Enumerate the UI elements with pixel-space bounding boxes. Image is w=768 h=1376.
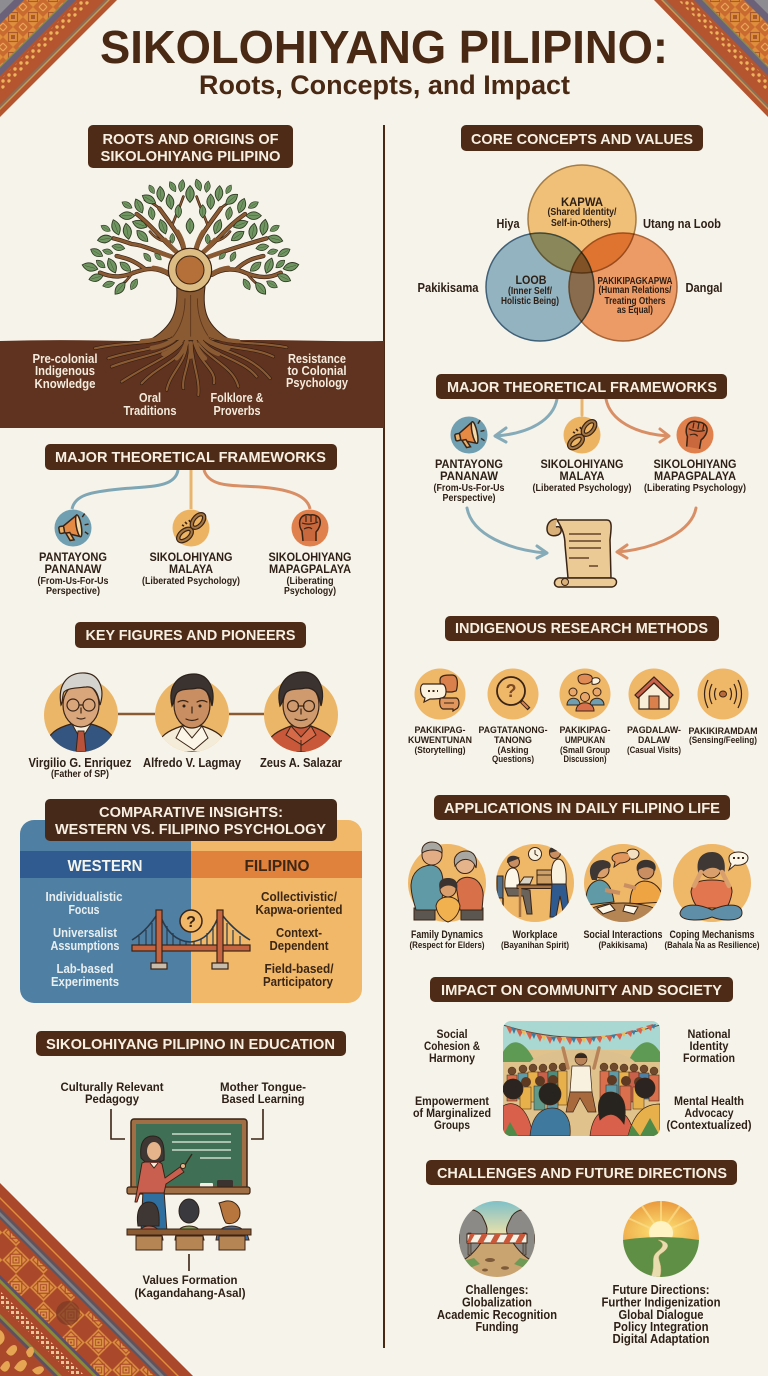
education labels: (Kagandahang-Asal) — [134, 1286, 246, 1300]
method labels: DALAW — [638, 735, 670, 746]
heading: KEY FIGURES AND PIONEERS — [86, 627, 296, 644]
venn labels: (Shared Identity/ — [548, 207, 617, 218]
filipino list: Field-based/ — [264, 962, 334, 976]
impact labels: Identity — [690, 1039, 729, 1053]
filipino list: Participatory — [263, 975, 333, 989]
connectors — [72, 470, 310, 509]
arrows — [467, 399, 696, 558]
root labels: to Colonial — [288, 364, 346, 378]
decorative textile: top left corner — [0, 0, 117, 117]
impact labels: of Marginalized — [413, 1106, 491, 1120]
application labels — [410, 929, 760, 951]
leaves — [147, 184, 156, 195]
scene: workplace — [496, 844, 574, 922]
western list: Experiments — [51, 975, 119, 989]
framework labels: MAPAGPALAYA — [654, 469, 736, 483]
method labels: UMPUKAN — [565, 735, 605, 746]
icon: raised fist — [292, 510, 328, 546]
column headers: FILIPINO — [244, 858, 310, 875]
heading: MAJOR THEORETICAL FRAMEWORKS — [55, 449, 326, 466]
venn labels: PAKIKIPAGKAPWA — [598, 276, 672, 287]
venn labels: Pakikisama — [418, 281, 479, 295]
icon: road barrier — [459, 1201, 535, 1277]
root labels — [32, 352, 348, 418]
knowledge medallion — [168, 248, 212, 292]
column headers: WESTERN — [68, 858, 142, 875]
framework labels: (From-Us-For-Us — [38, 576, 109, 587]
application labels: (Pakikisama) — [598, 940, 648, 951]
icon: bridge with question mark — [132, 910, 250, 969]
impact labels: Cohesion & — [424, 1039, 480, 1053]
venn labels: as Equal) — [617, 305, 653, 316]
panel: key figures — [28, 622, 342, 780]
application labels: Workplace — [512, 929, 558, 941]
education labels: Culturally Relevant — [60, 1080, 164, 1094]
western list: Lab-based — [56, 962, 114, 976]
ground band — [0, 340, 384, 428]
education labels: Pedagogy — [85, 1092, 139, 1106]
venn labels: (Human Relations/ — [598, 285, 672, 296]
method labels: PAKIKIPAG- — [414, 725, 466, 736]
future directions text — [602, 1283, 720, 1346]
central speaker — [563, 1048, 599, 1068]
venn labels: Dangal — [686, 281, 722, 295]
icon: scroll — [547, 519, 616, 587]
scene: coping — [673, 844, 751, 922]
impact labels: Mental Health — [674, 1094, 744, 1108]
impact labels — [413, 1027, 752, 1132]
method labels: (Sensing/Feeling) — [689, 735, 757, 746]
education labels: Mother Tongue- — [220, 1080, 306, 1094]
heading — [36, 1031, 346, 1056]
future directions text: Global Dialogue — [618, 1308, 704, 1322]
impact labels: (Contextualized) — [666, 1118, 752, 1132]
framework labels: MALAYA — [169, 562, 213, 576]
heading — [45, 799, 337, 841]
icon: group discussion — [560, 668, 610, 720]
teacher — [141, 1190, 167, 1232]
root labels: Oral — [139, 391, 161, 405]
heading — [75, 622, 306, 648]
framework labels: SIKOLOHIYANG — [540, 457, 624, 471]
framework labels: SIKOLOHIYANG — [268, 550, 352, 564]
framework labels: PANTAYONG — [435, 457, 503, 471]
impact labels: Empowerment — [415, 1094, 489, 1108]
venn labels: Hiya — [496, 217, 520, 231]
root labels: Proverbs — [214, 404, 261, 418]
panel: comparative insights — [20, 799, 362, 1003]
application labels: (Bayanihan Spirit) — [501, 940, 569, 951]
figure names: Zeus A. Salazar — [260, 756, 342, 770]
method labels: TANONG — [494, 735, 532, 746]
framework labels: MAPAGPALAYA — [269, 562, 351, 576]
heading: CHALLENGES AND FUTURE DIRECTIONS — [437, 1165, 727, 1182]
root labels: Folklore & — [210, 391, 264, 405]
icon: magnifier question: ? — [506, 681, 516, 701]
root labels: Knowledge — [34, 377, 96, 391]
method labels: (Storytelling) — [414, 745, 466, 756]
center divider line — [383, 125, 385, 1348]
icon: broken chain — [172, 510, 210, 546]
tree illustration — [81, 178, 300, 395]
education labels: Values Formation — [142, 1273, 238, 1287]
future directions text: Digital Adaptation — [612, 1332, 710, 1346]
scene: family — [408, 842, 486, 922]
venn labels: Utang na Loob — [643, 217, 721, 231]
future directions text: Further Indigenization — [602, 1296, 720, 1310]
framework labels: (Liberated Psychology) — [142, 576, 240, 587]
figure names: Alfredo V. Lagmay — [143, 756, 241, 770]
roots — [95, 335, 287, 395]
heading: APPLICATIONS IN DAILY FILIPINO LIFE — [444, 800, 720, 817]
icon: sunrise road — [623, 1201, 699, 1277]
connector lines — [118, 713, 264, 715]
western list: Assumptions — [50, 939, 120, 953]
heading: roots and origins: ROOTS AND ORIGINS OF — [102, 131, 278, 148]
framework labels — [38, 550, 352, 597]
filipino list — [256, 890, 342, 989]
future directions text: Policy Integration — [614, 1320, 708, 1334]
portrait: Lagmay — [155, 674, 229, 752]
icon: megaphone — [54, 510, 92, 546]
western list — [46, 890, 123, 989]
impact labels: National — [688, 1027, 730, 1041]
figure names: Virgilio G. Enriquez — [28, 756, 132, 770]
method labels: (Casual Visits) — [627, 745, 681, 756]
icon: raised fist — [676, 416, 714, 454]
title: SIKOLOHIYANG PILIPINO: — [100, 21, 668, 73]
framework labels: PANANAW — [440, 469, 499, 483]
panel: major theoretical frameworks (right) — [434, 374, 746, 587]
western list: Individualistic — [46, 890, 123, 904]
decorative textile: bottom left corner — [0, 1183, 193, 1376]
bracket connectors — [111, 1109, 263, 1271]
impact labels: Formation — [683, 1051, 735, 1065]
front row figures — [503, 1078, 660, 1136]
challenges text: Globalization — [462, 1296, 532, 1310]
challenges text — [437, 1283, 557, 1334]
filipino list: Kapwa-oriented — [256, 903, 342, 917]
icon: sensing waves — [698, 668, 748, 720]
venn labels: (Inner Self/ — [508, 286, 552, 297]
figure names: (Father of SP) — [51, 769, 109, 780]
venn diagram — [486, 165, 677, 341]
heading — [461, 125, 703, 151]
education labels — [60, 1080, 306, 1300]
icon: magnifier question — [488, 668, 538, 720]
root labels: Traditions — [124, 404, 177, 418]
method labels: KUWENTUNAN — [408, 735, 472, 746]
framework labels: PANTAYONG — [39, 550, 107, 564]
method labels — [408, 725, 758, 765]
heading — [426, 1160, 737, 1185]
impact labels: Advocacy — [684, 1106, 734, 1120]
method labels: PAGTATANONG- — [478, 725, 548, 736]
portrait: Enriquez — [44, 673, 118, 752]
framework labels: Perspective) — [442, 493, 496, 504]
scene: social interactions — [584, 844, 664, 923]
heading: WESTERN VS. FILIPINO PSYCHOLOGY — [55, 821, 326, 838]
heading: roots and origins: SIKOLOHIYANG PILIPINO — [100, 148, 281, 165]
panel: major theoretical frameworks (left) — [38, 444, 352, 597]
panel: applications in daily life — [408, 795, 760, 951]
filipino list: Dependent — [270, 939, 329, 953]
impact labels: Social — [436, 1027, 468, 1041]
students — [136, 1226, 163, 1240]
framework labels: Psychology) — [284, 586, 336, 597]
method labels: (Asking — [498, 745, 529, 756]
icon: megaphone — [450, 416, 488, 454]
venn labels: LOOB — [516, 273, 547, 287]
framework labels — [434, 457, 746, 504]
heading — [445, 616, 719, 641]
root labels: Indigenous — [35, 364, 95, 378]
method labels: PAKIKIPAG- — [560, 725, 610, 736]
heading — [45, 444, 337, 470]
panel: challenges and future directions — [426, 1160, 737, 1346]
root labels: Psychology — [286, 376, 348, 390]
portrait: Salazar — [264, 672, 338, 752]
comparison table — [20, 820, 362, 1003]
framework labels: (Liberating — [286, 576, 334, 587]
framework labels: (From-Us-For-Us — [434, 483, 505, 494]
framework labels: (Liberating Psychology) — [644, 483, 746, 494]
framework labels: (Liberated Psychology) — [532, 483, 632, 494]
icon: storytelling bubbles — [414, 668, 466, 720]
western list: Universalist — [53, 926, 118, 940]
venn labels: Treating Others — [604, 296, 666, 307]
venn labels: Self-in-Others) — [551, 218, 611, 229]
education labels: Based Learning — [222, 1092, 304, 1106]
method labels: PAGDALAW- — [627, 725, 681, 736]
method labels: PAKIKIRAMDAM — [688, 726, 758, 737]
venn labels — [418, 195, 722, 316]
filipino list: Collectivistic/ — [261, 890, 337, 904]
column headers — [68, 858, 310, 875]
panel: indigenous research methods — [408, 616, 758, 765]
venn labels: KAPWA — [561, 195, 603, 209]
challenges text: Academic Recognition — [437, 1308, 557, 1322]
subtitle: Roots, Concepts, and Impact — [199, 70, 570, 100]
panel: impact on community — [413, 977, 752, 1136]
heading: COMPARATIVE INSIGHTS: — [99, 804, 283, 821]
community scene illustration — [503, 1021, 660, 1136]
venn labels: Holistic Being) — [501, 296, 559, 307]
impact labels: Groups — [434, 1118, 470, 1132]
heading: IMPACT ON COMMUNITY AND SOCIETY — [441, 982, 722, 999]
future directions text: Future Directions: — [612, 1283, 710, 1297]
framework labels: PANANAW — [44, 562, 102, 576]
application labels: Family Dynamics — [411, 929, 483, 941]
classroom illustration — [127, 1119, 251, 1250]
application labels: (Respect for Elders) — [410, 940, 484, 951]
heading — [434, 795, 730, 820]
method labels: Discussion) — [564, 754, 606, 765]
panel: education — [36, 1031, 346, 1300]
panel: core concepts and values — [418, 125, 722, 341]
heading: SIKOLOHIYANG PILIPINO IN EDUCATION — [46, 1036, 335, 1053]
method labels: Questions) — [492, 754, 534, 765]
application labels: Social Interactions — [584, 929, 662, 941]
impact labels: Harmony — [429, 1051, 475, 1065]
root labels: Resistance — [288, 352, 346, 366]
icon: bridge with question mark: ? — [186, 914, 196, 931]
panel: roots and origins — [0, 125, 384, 428]
framework labels: Perspective) — [46, 586, 100, 597]
heading — [436, 374, 727, 399]
heading: roots and origins — [88, 125, 293, 168]
icon: broken chain — [564, 416, 600, 454]
framework labels: SIKOLOHIYANG — [150, 550, 232, 564]
challenges text: Funding — [476, 1320, 518, 1334]
figure names — [28, 756, 342, 780]
heading: MAJOR THEORETICAL FRAMEWORKS — [447, 379, 717, 396]
decorative textile: top right corner — [654, 0, 768, 117]
method labels: (Small Group — [560, 745, 610, 756]
framework labels: MALAYA — [560, 469, 605, 483]
trunk — [148, 287, 232, 341]
root labels: Pre-colonial — [32, 352, 98, 366]
challenges text: Challenges: — [466, 1283, 528, 1297]
heading — [430, 977, 733, 1002]
heading: CORE CONCEPTS AND VALUES — [471, 131, 693, 148]
icon: house — [628, 668, 680, 720]
framework labels: SIKOLOHIYANG — [654, 457, 736, 471]
filipino list: Context- — [276, 926, 322, 940]
western list: Focus — [68, 903, 100, 917]
heading: INDIGENOUS RESEARCH METHODS — [455, 620, 708, 637]
branches — [100, 197, 281, 285]
